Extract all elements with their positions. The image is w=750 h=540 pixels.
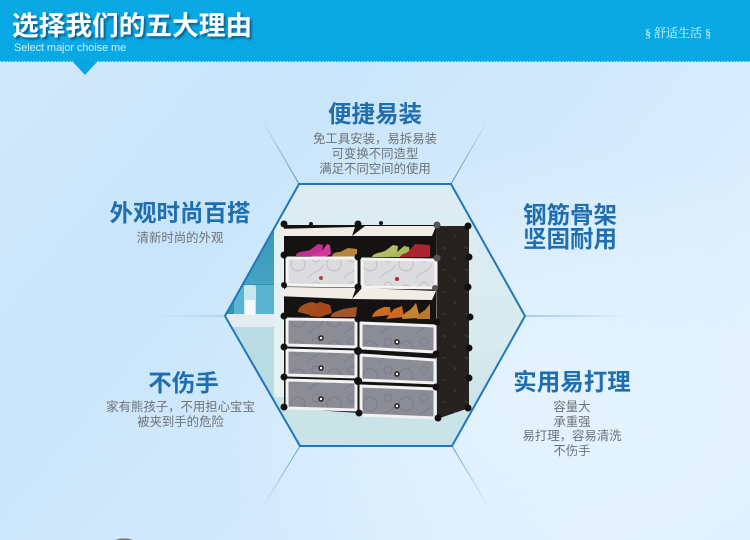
cabinet back: [284, 225, 436, 418]
feature: practical and easy to clean: [513, 369, 631, 458]
feature: practical and easy to clean: 承重强: [553, 415, 591, 429]
door row one: [287, 258, 436, 288]
doors lower rows: [287, 319, 435, 418]
shoes row one: [296, 244, 430, 257]
feature: practical and easy to clean: 容量大: [553, 400, 591, 414]
feature: practical and easy to clean: 不伤手: [553, 444, 591, 458]
product: shoe cabinet: [275, 220, 474, 422]
feature: no hand injury: 被夹到手的危险: [137, 415, 224, 429]
feature: stylish look: 清新时尚的外观: [137, 231, 223, 245]
feature: easy assembly: 免工具安装，易拆易装: [313, 132, 437, 146]
decorative rays: [150, 120, 630, 508]
header band: [0, 0, 750, 75]
title: 选择我们的五大理由: [12, 11, 252, 41]
header right tag: § 舒适生活 §: [645, 26, 711, 40]
second flap doors: [275, 287, 356, 299]
feature: steel frame: 坚固耐用: [523, 226, 617, 252]
feature: no hand injury: 家有熊孩子，不用担心宝宝: [106, 400, 255, 414]
feature: practical and easy to clean: 实用易打理: [513, 369, 631, 395]
subtitle: Select major choise me: [14, 42, 126, 54]
feature: steel frame: 钢筋骨架: [523, 202, 617, 228]
feature: steel frame: [523, 202, 617, 252]
door knobs: [319, 336, 399, 408]
shoes row two: [298, 302, 430, 319]
cabinet side panel: [436, 226, 469, 419]
feature: easy assembly: 便捷易装: [328, 101, 422, 127]
feature: practical and easy to clean: 易打理，容易清洗: [522, 429, 622, 443]
feature: stylish look: [110, 200, 250, 245]
feature: no hand injury: 不伤手: [148, 370, 219, 396]
bottom edge object: [115, 538, 133, 540]
feature: easy assembly: [313, 101, 437, 176]
feature: stylish look: 外观时尚百搭: [110, 200, 250, 226]
feature: no hand injury: [106, 370, 255, 429]
top flap doors: [275, 227, 355, 236]
feature: easy assembly: 可变换不同造型: [332, 147, 418, 161]
connector joints: [280, 220, 474, 422]
feature: easy assembly: 满足不同空间的使用: [319, 162, 431, 176]
hexagon panel: [225, 184, 525, 446]
